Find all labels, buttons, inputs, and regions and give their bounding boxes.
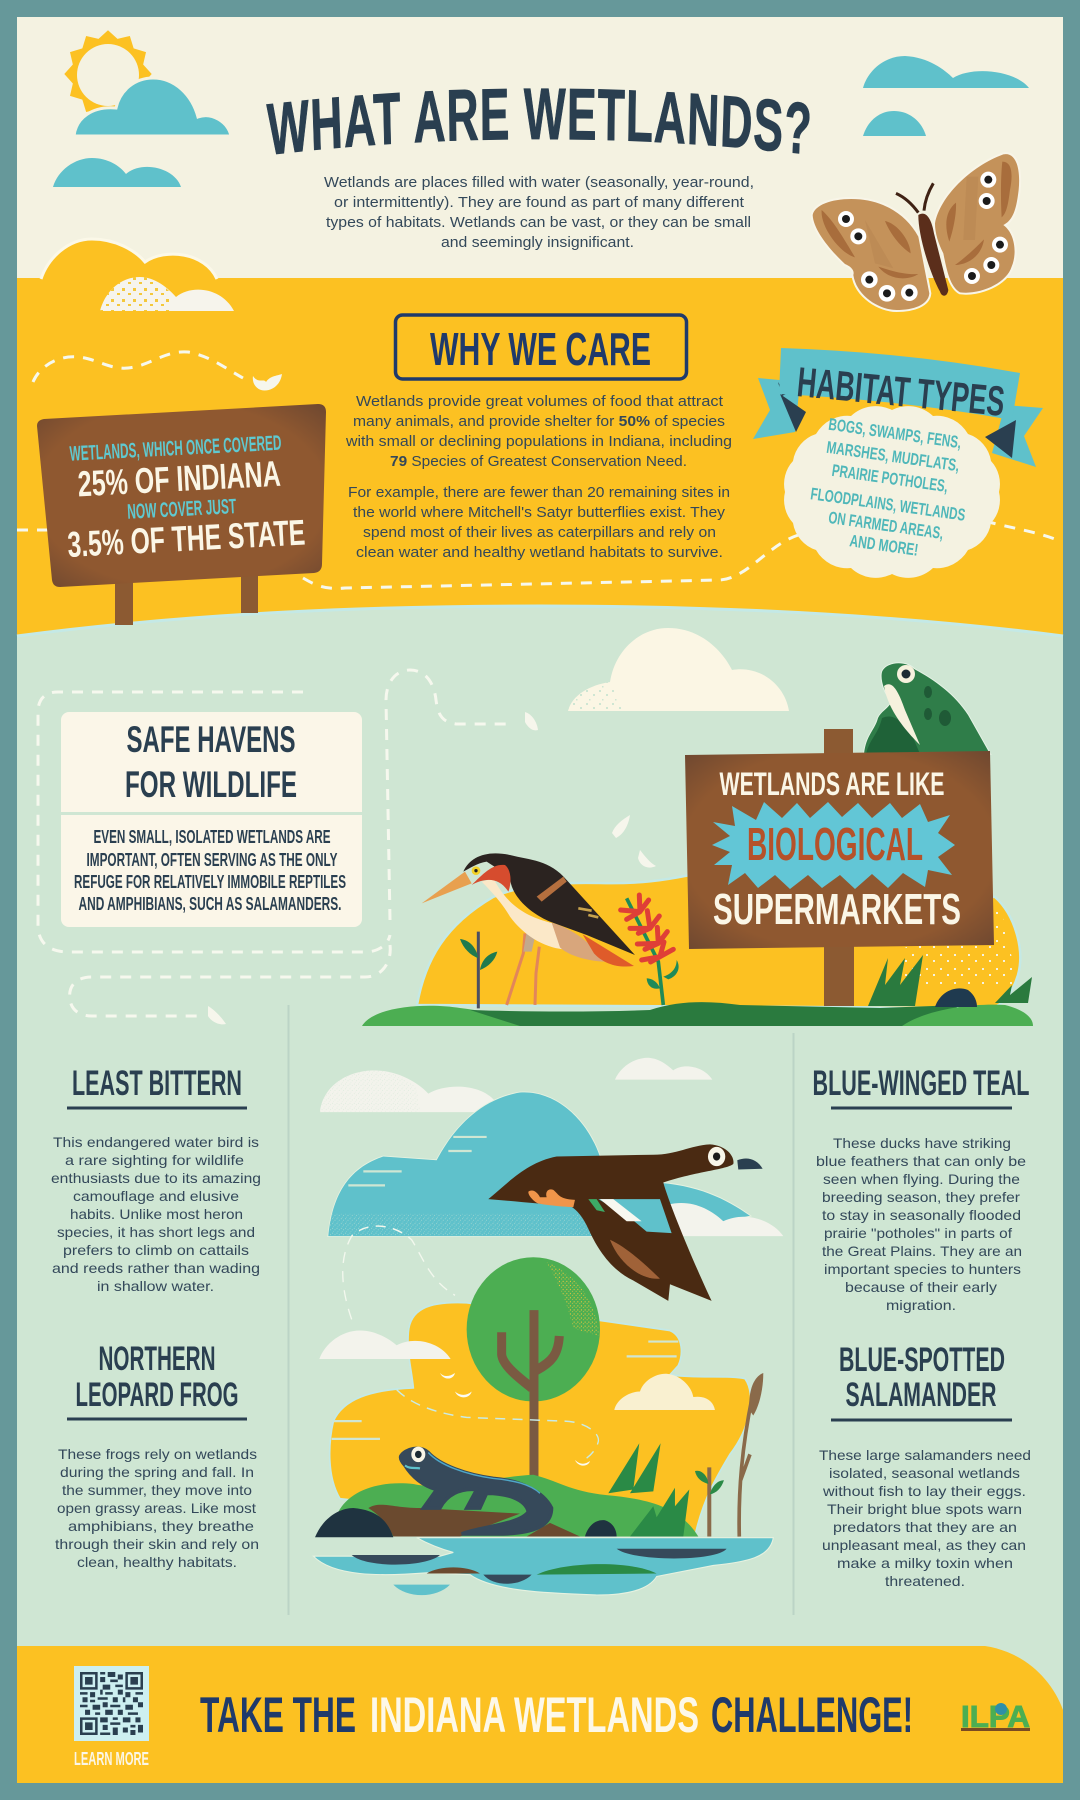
least bittern text: enthusiasts due to its amazing [51, 1170, 261, 1186]
teal text: blue feathers that can only be [816, 1153, 1026, 1169]
safe havens body: EVEN SMALL, ISOLATED WETLANDS ARE [94, 827, 330, 847]
frog text: open grassy areas. Like most [57, 1500, 256, 1516]
teal rule [831, 1106, 1012, 1110]
salamander text: These large salamanders need [819, 1447, 1031, 1463]
icon: yellow cloud [41, 239, 217, 279]
teal text: to stay in seasonally flooded [822, 1207, 1021, 1223]
least bittern text: prefers to climb on cattails [63, 1242, 249, 1258]
wooden sign: Indiana statistic: 3.5% OF THE STATE [66, 512, 306, 565]
panel: cream sky header [17, 17, 1063, 279]
salamander text: without fish to lay their eggs. [822, 1483, 1026, 1499]
habitat types badge [753, 348, 1043, 578]
frog heading: NORTHERN [98, 1340, 216, 1378]
least bittern text: species, it has short legs and [57, 1224, 255, 1240]
habitat list text [809, 415, 966, 560]
frog rule [67, 1418, 247, 1420]
intro text: Wetlands are places filled with water (seasonally, year-round, [324, 174, 754, 191]
sign headline top: WETLANDS ARE LIKE [720, 766, 944, 802]
dirt [368, 1505, 580, 1537]
teal text: prairie "potholes" in parts of [824, 1225, 1012, 1241]
why we care body text: many animals, and provide shelter for 50% of species [353, 413, 725, 430]
safe havens body [74, 827, 346, 914]
icon: small white bird mid [525, 712, 538, 730]
intro text: or intermittently). They are found as part of many different [334, 194, 745, 211]
rocks [315, 1508, 617, 1537]
wooden sign: biological supermarkets [685, 751, 994, 1006]
icon: teal cloud by sun [74, 78, 231, 136]
intro text [324, 174, 754, 251]
least bittern text [51, 1134, 261, 1294]
QR code [74, 1666, 149, 1741]
footer call to action: INDIANA WETLANDS [370, 1687, 699, 1743]
least bittern text: in shallow water. [97, 1278, 214, 1294]
least bittern heading: LEAST BITTERN [72, 1064, 242, 1103]
water [313, 1538, 773, 1595]
salamander text [819, 1447, 1031, 1589]
icon: teal cloud upper right [863, 56, 1029, 88]
yellow blob behind bird and sign [417, 875, 1020, 1008]
icon: red flower [621, 895, 679, 1005]
icon: butterfly [813, 154, 1019, 310]
scalloped habitat list card [784, 406, 1000, 578]
frog heading: LEOPARD FROG [76, 1376, 238, 1414]
habitat list text: BOGS, SWAMPS, FENS, [827, 415, 963, 452]
teal text [816, 1135, 1026, 1313]
icon: cream cloud mint section [568, 628, 789, 711]
duck [488, 1144, 763, 1301]
teal text: seen when flying. During the [823, 1171, 1020, 1187]
least bittern text: This endangered water bird is [53, 1134, 259, 1150]
why we care body text: Wetlands provide great volumes of food that attract [356, 393, 724, 410]
footer call to action: CHALLENGE! [711, 1687, 913, 1743]
teal text: the Great Plains. They are an [822, 1243, 1022, 1259]
dashed flight path around safe havens card [38, 670, 512, 952]
least bittern column [51, 1064, 261, 1294]
icon: teal cloud left [53, 158, 181, 187]
salamander text: Their bright blue spots warn [827, 1501, 1022, 1517]
dashed path over blob [397, 1390, 598, 1458]
icon: teal cloud small right [863, 111, 926, 136]
icon: bird least bittern [422, 853, 635, 1008]
icon: sun [64, 30, 152, 118]
wooden sign: Indiana statistic [37, 404, 326, 625]
salamander text: make a milky toxin when [837, 1555, 1013, 1571]
logo ILPA: ILPA [961, 1699, 1030, 1734]
icon: small white bird upper [253, 374, 282, 390]
habitat list text: AND MORE! [848, 531, 919, 560]
title: WHAT ARE WETLANDS? [266, 88, 810, 154]
frog text: clean, healthy habitats. [77, 1554, 237, 1570]
burst behind biological [712, 802, 955, 889]
why we care badge: WHY WE CARE [430, 323, 651, 375]
salamander text: isolated, seasonal wetlands [829, 1465, 1020, 1481]
habitat list text: PRAIRIE POTHOLES, [831, 461, 949, 496]
white birds [440, 1373, 590, 1466]
salamander text: unpleasant meal, as they can [822, 1537, 1026, 1553]
intro text: and seemingly insignificant. [441, 234, 634, 251]
safe havens body: IMPORTANT, OFTEN SERVING AS THE ONLY [86, 850, 338, 870]
footer call to action: TAKE THE [200, 1687, 356, 1743]
white cloud small [615, 1058, 712, 1080]
panel: yellow footer band [17, 1646, 1063, 1783]
post top of supermarket sign [824, 729, 853, 757]
panel: yellow why we care band [17, 278, 1063, 643]
teal text: migration. [886, 1297, 956, 1313]
least bittern text: habits. Unlike most heron [70, 1206, 243, 1222]
salamander rule [831, 1418, 1012, 1422]
icon: white cloud on yellow [100, 277, 234, 311]
white cloud right of duck [668, 1203, 783, 1236]
blue-winged teal column [812, 1064, 1030, 1313]
frog text: the summer, they move into [62, 1482, 252, 1498]
why we care body text: with small or declining populations in Indiana, including [345, 433, 732, 450]
icon: small white birds near sign [612, 815, 656, 868]
salamander heading [839, 1341, 1005, 1414]
tree [467, 1257, 600, 1477]
grass and rock right of post [868, 955, 1032, 1007]
panel: safe havens card [61, 712, 362, 927]
safe havens body: AND AMPHIBIANS, SUCH AS SALAMANDERS. [78, 894, 342, 914]
safe havens body: REFUGE FOR RELATIVELY IMMOBILE REPTILES [74, 872, 346, 892]
column dividers [288, 1005, 794, 1615]
why we care body text [345, 393, 732, 561]
wooden sign: Indiana statistic: WETLANDS, WHICH ONCE COVERED [69, 432, 282, 466]
salamander [401, 1447, 552, 1534]
ground [362, 1002, 1033, 1026]
speckle texture on blob [900, 905, 1018, 985]
white cloud textured [320, 1070, 507, 1112]
dashed flight path: lower yellow band [17, 521, 1062, 588]
ribbon front [779, 348, 1020, 420]
frog text: amphibians, they breathe [68, 1518, 254, 1534]
frog on sign [864, 663, 990, 754]
teal cloud behind duck [328, 1092, 750, 1236]
teal text: because of their early [845, 1279, 997, 1295]
panel: mint wildlife section [17, 606, 1063, 1740]
habitat list text: FLOODPLAINS, WETLANDS [809, 484, 966, 525]
frog text [55, 1446, 259, 1570]
intro text: types of habitats. Wetlands can be vast, or they can be small [326, 214, 751, 231]
dashed loop [343, 1226, 455, 1319]
safe havens heading: SAFE HAVENS [126, 719, 296, 760]
sign headline biological: BIOLOGICAL [747, 818, 923, 870]
wooden sign: Indiana statistic: 25% OF INDIANA [77, 453, 282, 504]
frog text: through their skin and rely on [55, 1536, 259, 1552]
northern leopard frog column [55, 1340, 259, 1570]
safe havens heading [125, 719, 297, 805]
least bittern rule [67, 1106, 247, 1110]
blue-spotted salamander column [819, 1341, 1031, 1589]
dashed flight path: upper yellow band [33, 352, 243, 382]
plant small [460, 932, 497, 1008]
marsh plants [695, 1373, 763, 1537]
why we care body text: 79 Species of Greatest Conservation Need. [390, 453, 687, 470]
center illustration: duck, tree, salamander [313, 1058, 783, 1595]
least bittern text: camouflage and elusive [73, 1188, 239, 1204]
icon: small white bird low [208, 1006, 226, 1024]
habitat list text: MARSHES, MUDFLATS, [825, 438, 961, 475]
why we care body text: spend most of their lives as caterpillars and rely on [363, 524, 716, 541]
teal text: breeding season, they prefer [822, 1189, 1020, 1205]
why we care body text: For example, there are fewer than 20 remaining sites in [348, 484, 730, 501]
wooden sign: Indiana statistic: NOW COVER JUST [127, 495, 237, 524]
teal text: important species to hunters [824, 1261, 1021, 1277]
legs [507, 932, 539, 1005]
why we care badge [396, 315, 686, 379]
island [337, 1475, 698, 1537]
frog heading [76, 1340, 238, 1414]
ribbon tails [753, 378, 1043, 467]
frog text: These frogs rely on wetlands [58, 1446, 257, 1462]
salamander text: threatened. [885, 1573, 965, 1589]
sign headline supermarkets: SUPERMARKETS [713, 885, 961, 934]
learn more label: LEARN MORE [74, 1749, 149, 1769]
teal text: These ducks have striking [833, 1135, 1011, 1151]
frog text: during the spring and fall. In [60, 1464, 254, 1480]
safe havens heading: FOR WILDLIFE [125, 764, 297, 805]
cream cloud on blob [614, 1374, 715, 1410]
dashed flight path below safe havens card [70, 945, 390, 1016]
least bittern text: and reeds rather than wading [52, 1260, 260, 1276]
yellow blob [330, 1302, 751, 1536]
why we care body text: the world where Mitchell's Satyr butterflies exist. They [353, 504, 726, 521]
grass spikes [608, 1443, 661, 1493]
habitat list text: ON FARMED AREAS, [827, 508, 945, 543]
white cloud over blob [319, 1330, 451, 1359]
why we care body text: clean water and healthy wetland habitats to survive. [356, 544, 723, 561]
least bittern text: a rare sighting for wildlife [65, 1152, 244, 1168]
salamander text: predators that they are an [833, 1519, 1017, 1535]
